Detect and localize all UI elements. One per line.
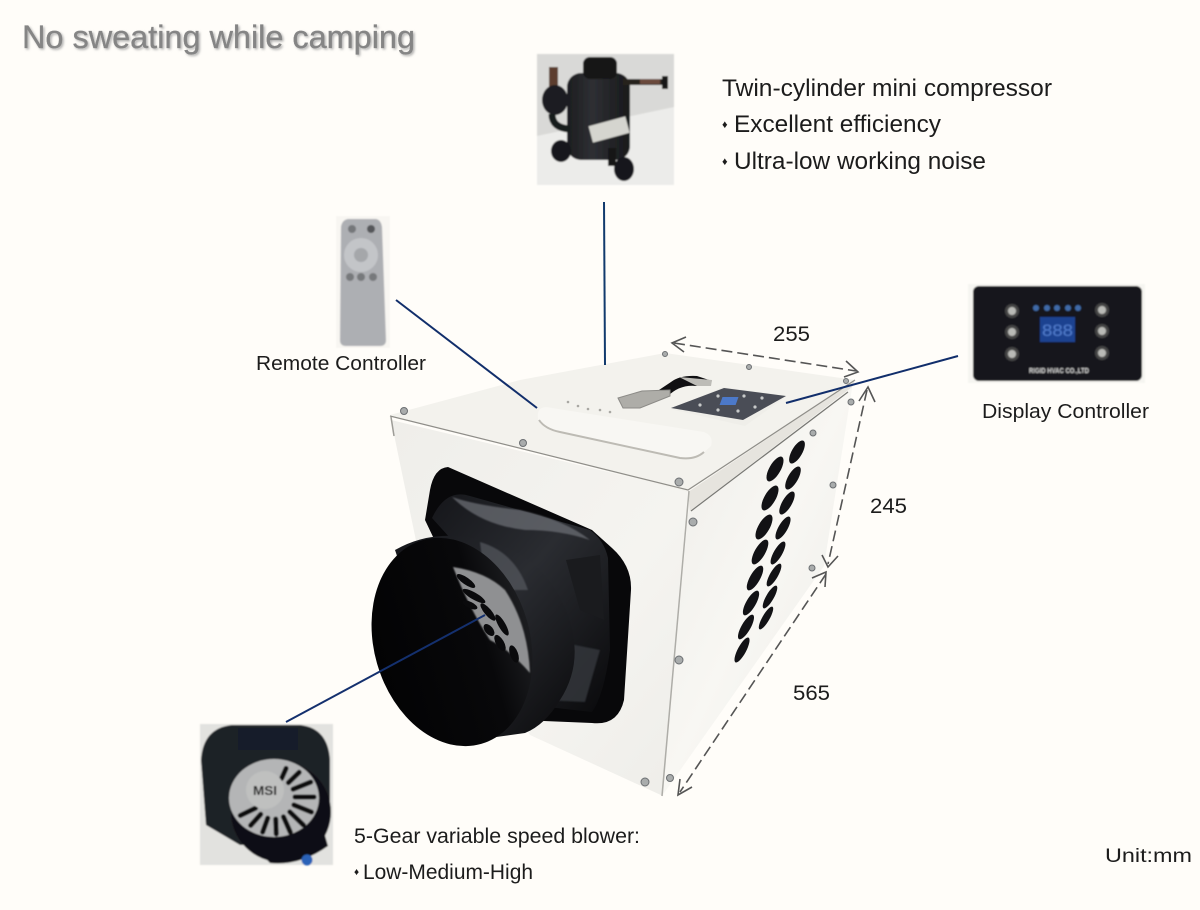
air conditioner unit <box>348 352 855 796</box>
photo: compressor <box>537 54 674 185</box>
dimension arrow: height 245 <box>822 387 875 567</box>
photo: blower: MSI <box>253 783 277 798</box>
unit note: Unit:mm <box>1105 846 1192 867</box>
fan grille <box>453 567 530 673</box>
blower housing <box>432 494 610 712</box>
dimension arrow: length 565 <box>678 572 826 795</box>
blower duct barrel <box>395 536 575 742</box>
blower outlet frame <box>425 467 631 723</box>
blower description: ♦ <box>354 867 359 878</box>
unit side panel <box>662 382 853 796</box>
photo: blower <box>200 724 333 866</box>
unit front panel <box>391 420 688 796</box>
title: No sweating while camping <box>22 19 415 55</box>
photo: display controller: 888 <box>1042 321 1073 340</box>
dimension label: 245: 245 <box>870 495 907 518</box>
leader line: blower <box>286 615 485 722</box>
compressor description: Twin-cylinder mini compressor <box>722 75 1052 102</box>
control panel on top of unit <box>670 387 787 426</box>
compressor description: ♦ <box>722 119 728 131</box>
leader line: display controller <box>786 356 958 403</box>
photo: display controller <box>968 284 1145 383</box>
remote on top of unit <box>538 401 712 458</box>
blower description: Low-Medium-High <box>363 861 533 884</box>
leader line: compressor <box>604 202 605 365</box>
compressor shell <box>567 73 630 160</box>
compressor description <box>722 75 1052 175</box>
compressor description: Ultra-low working noise <box>734 148 986 175</box>
blower duct mouth <box>348 519 556 765</box>
screws <box>400 352 854 786</box>
label: display controller: Display Controller <box>982 400 1149 423</box>
blower description <box>354 825 640 884</box>
photo: display controller: RIGID HVAC CO.,LTD <box>1029 368 1089 375</box>
blower description: 5-Gear variable speed blower: <box>354 825 640 848</box>
label: remote controller: Remote Controller <box>256 352 426 375</box>
compressor description: ♦ <box>722 156 728 168</box>
dimension label: 565: 565 <box>793 682 830 705</box>
leader line: remote controller <box>396 300 537 408</box>
dimension arrow: width 255 <box>672 337 858 377</box>
handle on top of unit <box>618 376 712 408</box>
dimension label: 255: 255 <box>773 323 810 346</box>
ventilation slots <box>732 438 808 664</box>
title: No sweating while camping <box>24 20 416 56</box>
unit top panel <box>390 353 855 492</box>
compressor description: Excellent efficiency <box>734 111 941 138</box>
photo: remote controller <box>336 216 390 348</box>
